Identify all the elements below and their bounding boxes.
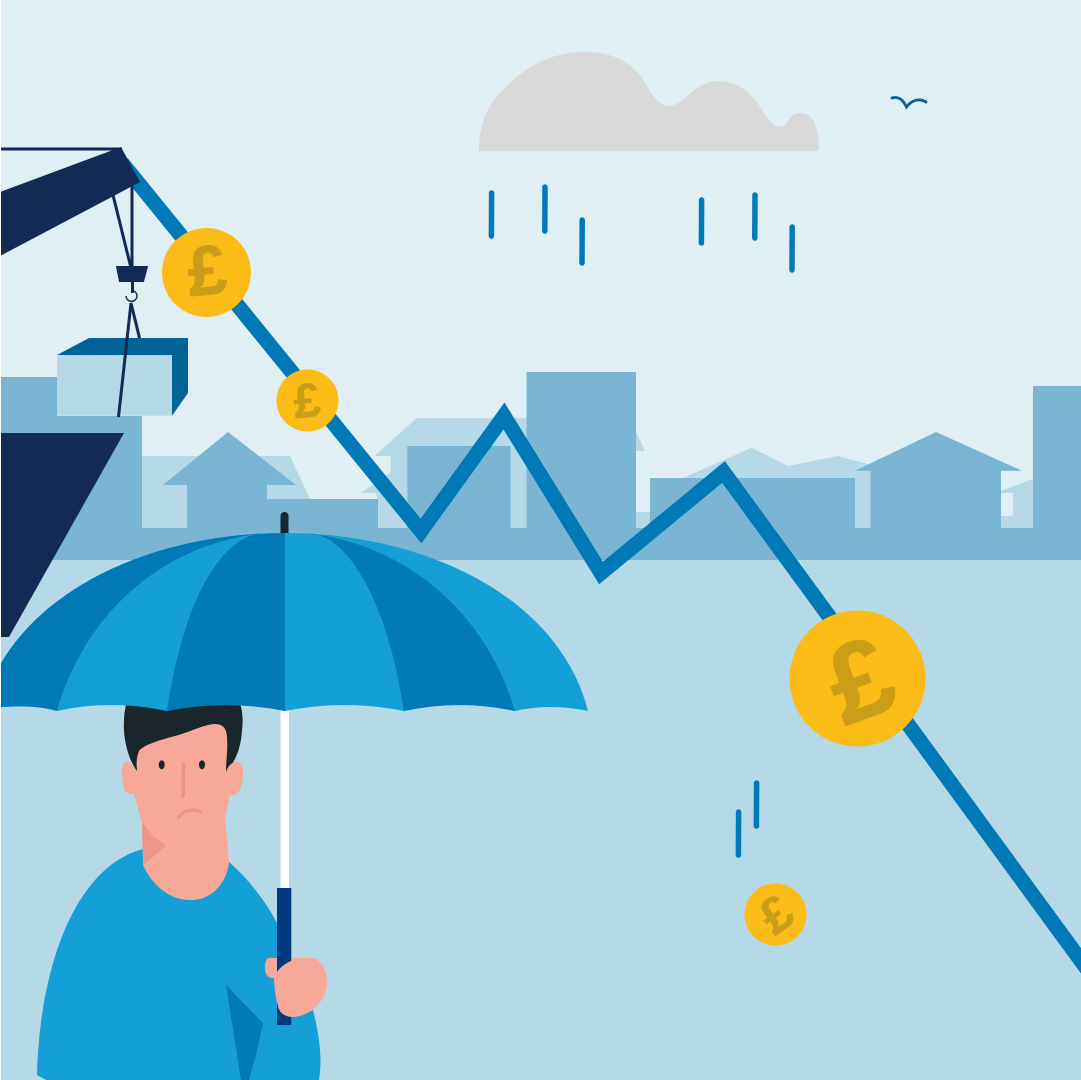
crane cables bbox=[113, 180, 132, 293]
coin 1 bbox=[162, 228, 251, 317]
hanging crate bbox=[57, 303, 188, 417]
nose bbox=[181, 764, 185, 796]
cloud bbox=[479, 52, 819, 151]
thumb bbox=[265, 958, 277, 978]
coin 2: £ bbox=[292, 374, 323, 429]
right eye bbox=[199, 760, 205, 769]
fist bbox=[274, 958, 327, 1017]
umbrella right dark panel bbox=[300, 533, 515, 711]
falling motion lines bbox=[738, 783, 757, 855]
left ear bbox=[122, 761, 140, 794]
rain drops bbox=[491, 187, 792, 270]
sweater bbox=[37, 849, 320, 1080]
umbrella tip bbox=[280, 512, 288, 536]
umbrella left dark panel bbox=[0, 533, 285, 711]
right ear bbox=[224, 762, 243, 795]
person bbox=[37, 704, 320, 1080]
skyline: background houses bbox=[142, 418, 1033, 528]
umbrella centre dark panel bbox=[167, 533, 285, 711]
face and neck bbox=[134, 724, 230, 900]
falling price line chart bbox=[122, 163, 1081, 980]
coin 1: £ bbox=[184, 230, 230, 311]
frown bbox=[178, 810, 201, 818]
coin 2 bbox=[276, 370, 338, 432]
skyline: foreground buildings bbox=[0, 372, 1081, 560]
crane arm bbox=[0, 147, 140, 256]
umbrella handle bbox=[277, 888, 291, 1025]
hair bbox=[124, 704, 243, 773]
left eye bbox=[159, 760, 165, 769]
sweater fold bbox=[226, 985, 263, 1080]
crane base bbox=[0, 433, 124, 637]
crane hook block bbox=[116, 266, 148, 282]
neck shadow bbox=[142, 822, 166, 865]
crane hook bbox=[126, 291, 137, 301]
ground bbox=[0, 560, 1081, 1080]
coin 3: £ bbox=[810, 612, 910, 749]
crane wire: top bbox=[0, 148, 122, 150]
coin 4: £ bbox=[749, 883, 804, 945]
bird bbox=[892, 97, 926, 107]
left edge strip bbox=[0, 0, 1, 1080]
hand bbox=[265, 958, 327, 1017]
small house window bbox=[1001, 493, 1013, 516]
umbrella canopy bbox=[0, 533, 588, 711]
umbrella shaft bbox=[280, 708, 289, 890]
umbrella bbox=[0, 512, 588, 890]
